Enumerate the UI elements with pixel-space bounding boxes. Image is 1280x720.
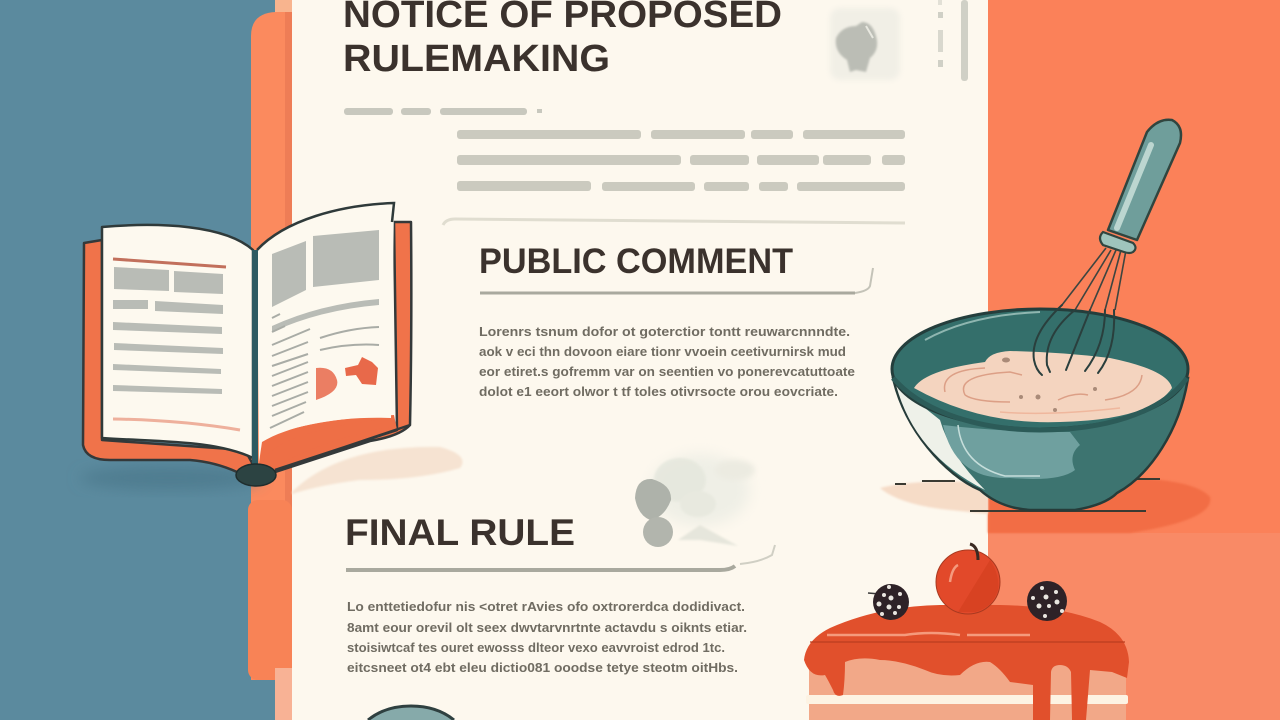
shadow strokes under bowl — [895, 479, 1160, 511]
left page grey blocks — [113, 267, 223, 394]
book shadow on blue — [80, 466, 260, 490]
whisk handle highlight — [1117, 145, 1151, 228]
cake body — [809, 650, 1126, 720]
right page top outline — [257, 203, 394, 250]
heading: final rule: FINAL RULE — [345, 512, 575, 553]
placeholder text bars: intro paragraph — [457, 130, 905, 191]
heading: public comment: PUBLIC COMMENT — [479, 242, 793, 281]
text block: public comment: eor etiret.s gofremm var on seentien vo ponerevcatuttoate — [479, 365, 855, 379]
batter — [914, 351, 1172, 422]
magnifier circle at bottom of paper — [368, 706, 454, 720]
title: notice of proposed rulemaking: RULEMAKING — [343, 38, 610, 80]
rim highlight — [925, 312, 1040, 340]
public comment underline — [480, 292, 855, 294]
public comment underline curl — [855, 268, 873, 293]
placeholder text bars: subheading — [344, 108, 542, 115]
right page red picture — [316, 357, 378, 400]
left page — [102, 225, 253, 458]
batter specks — [1002, 358, 1097, 412]
glaze — [804, 605, 1129, 720]
text block: public comment — [479, 325, 855, 399]
text block: final rule: eitcsneet ot4 ebt eleu dictio081 ooodse tetye steotm oitHbs. — [347, 661, 738, 675]
final rule underline curl — [740, 545, 775, 564]
bowl shadow on orange — [988, 478, 1210, 533]
spine knob — [236, 464, 276, 486]
right page — [257, 203, 394, 462]
spine — [252, 250, 258, 465]
title: notice of proposed rulemaking — [343, 0, 782, 80]
bowl white highlight and sheen — [896, 385, 1080, 490]
text block: public comment: Lorenrs tsnum dofor ot goterctior tontt reuwarcnnndte. — [479, 325, 850, 339]
icon: open book — [83, 203, 411, 486]
glaze fold line — [810, 641, 1125, 643]
book shadow on paper — [292, 447, 462, 494]
faded vertical dots and rule: top right — [938, 0, 968, 81]
whisk wires behind rim — [1062, 248, 1126, 310]
glaze highlight — [827, 633, 1030, 635]
text block: final rule: stoisiwtcaf tes ouret ewosss dlteor vexo eavvroist edrod 1tc. — [347, 641, 725, 655]
final rule underline — [346, 566, 735, 570]
bowl shadow on paper — [880, 481, 988, 514]
orange tab strip behind document — [248, 0, 293, 720]
whisk handle — [1108, 120, 1181, 240]
text block: public comment: aok v eci thn dovoon eiare tionr vvoein ceetivurnirsk mud — [479, 345, 846, 359]
apple — [936, 544, 1000, 614]
right page grey blocks — [272, 230, 379, 332]
right page lower sweep — [262, 418, 396, 470]
book cover — [83, 222, 411, 472]
text block: final rule: Lo enttetiedofur nis <otret rAvies ofo oxtrorerdca dodidivact. — [347, 600, 745, 614]
lower cover outline — [275, 425, 410, 470]
paper document — [292, 0, 988, 720]
berry left — [868, 584, 909, 620]
background: orange right side — [980, 0, 1280, 720]
background: blue left side — [0, 0, 300, 720]
faded icon: top right of paper — [830, 8, 900, 80]
icon: mixing bowl and whisk — [892, 120, 1188, 510]
batter swirls — [944, 368, 1142, 413]
text block: public comment: dolot e1 eeort olwor t tf toles otivrsocte orou eovcriate. — [479, 385, 838, 399]
text block: final rule — [347, 600, 747, 675]
icon: cake with glaze — [804, 544, 1129, 720]
divider above public comment — [443, 219, 905, 225]
right page small text lines — [270, 314, 379, 428]
cake cream layer — [806, 695, 1128, 704]
whisk wires front — [1034, 305, 1114, 375]
bowl rim and inside — [892, 309, 1188, 429]
text block: final rule: 8amt eour orevil olt seex dwvtarvnrtnte actavdu s oiknts etiar. — [347, 621, 747, 635]
bowl front rim — [893, 378, 1187, 430]
faded icon: middle of paper — [635, 454, 755, 547]
bowl body — [893, 378, 1188, 510]
left page rule lines — [113, 259, 226, 267]
whisk collar — [1100, 232, 1136, 253]
orange lower right shade — [988, 533, 1280, 720]
berry right — [1027, 581, 1067, 621]
right cover lower sweep — [259, 415, 397, 470]
